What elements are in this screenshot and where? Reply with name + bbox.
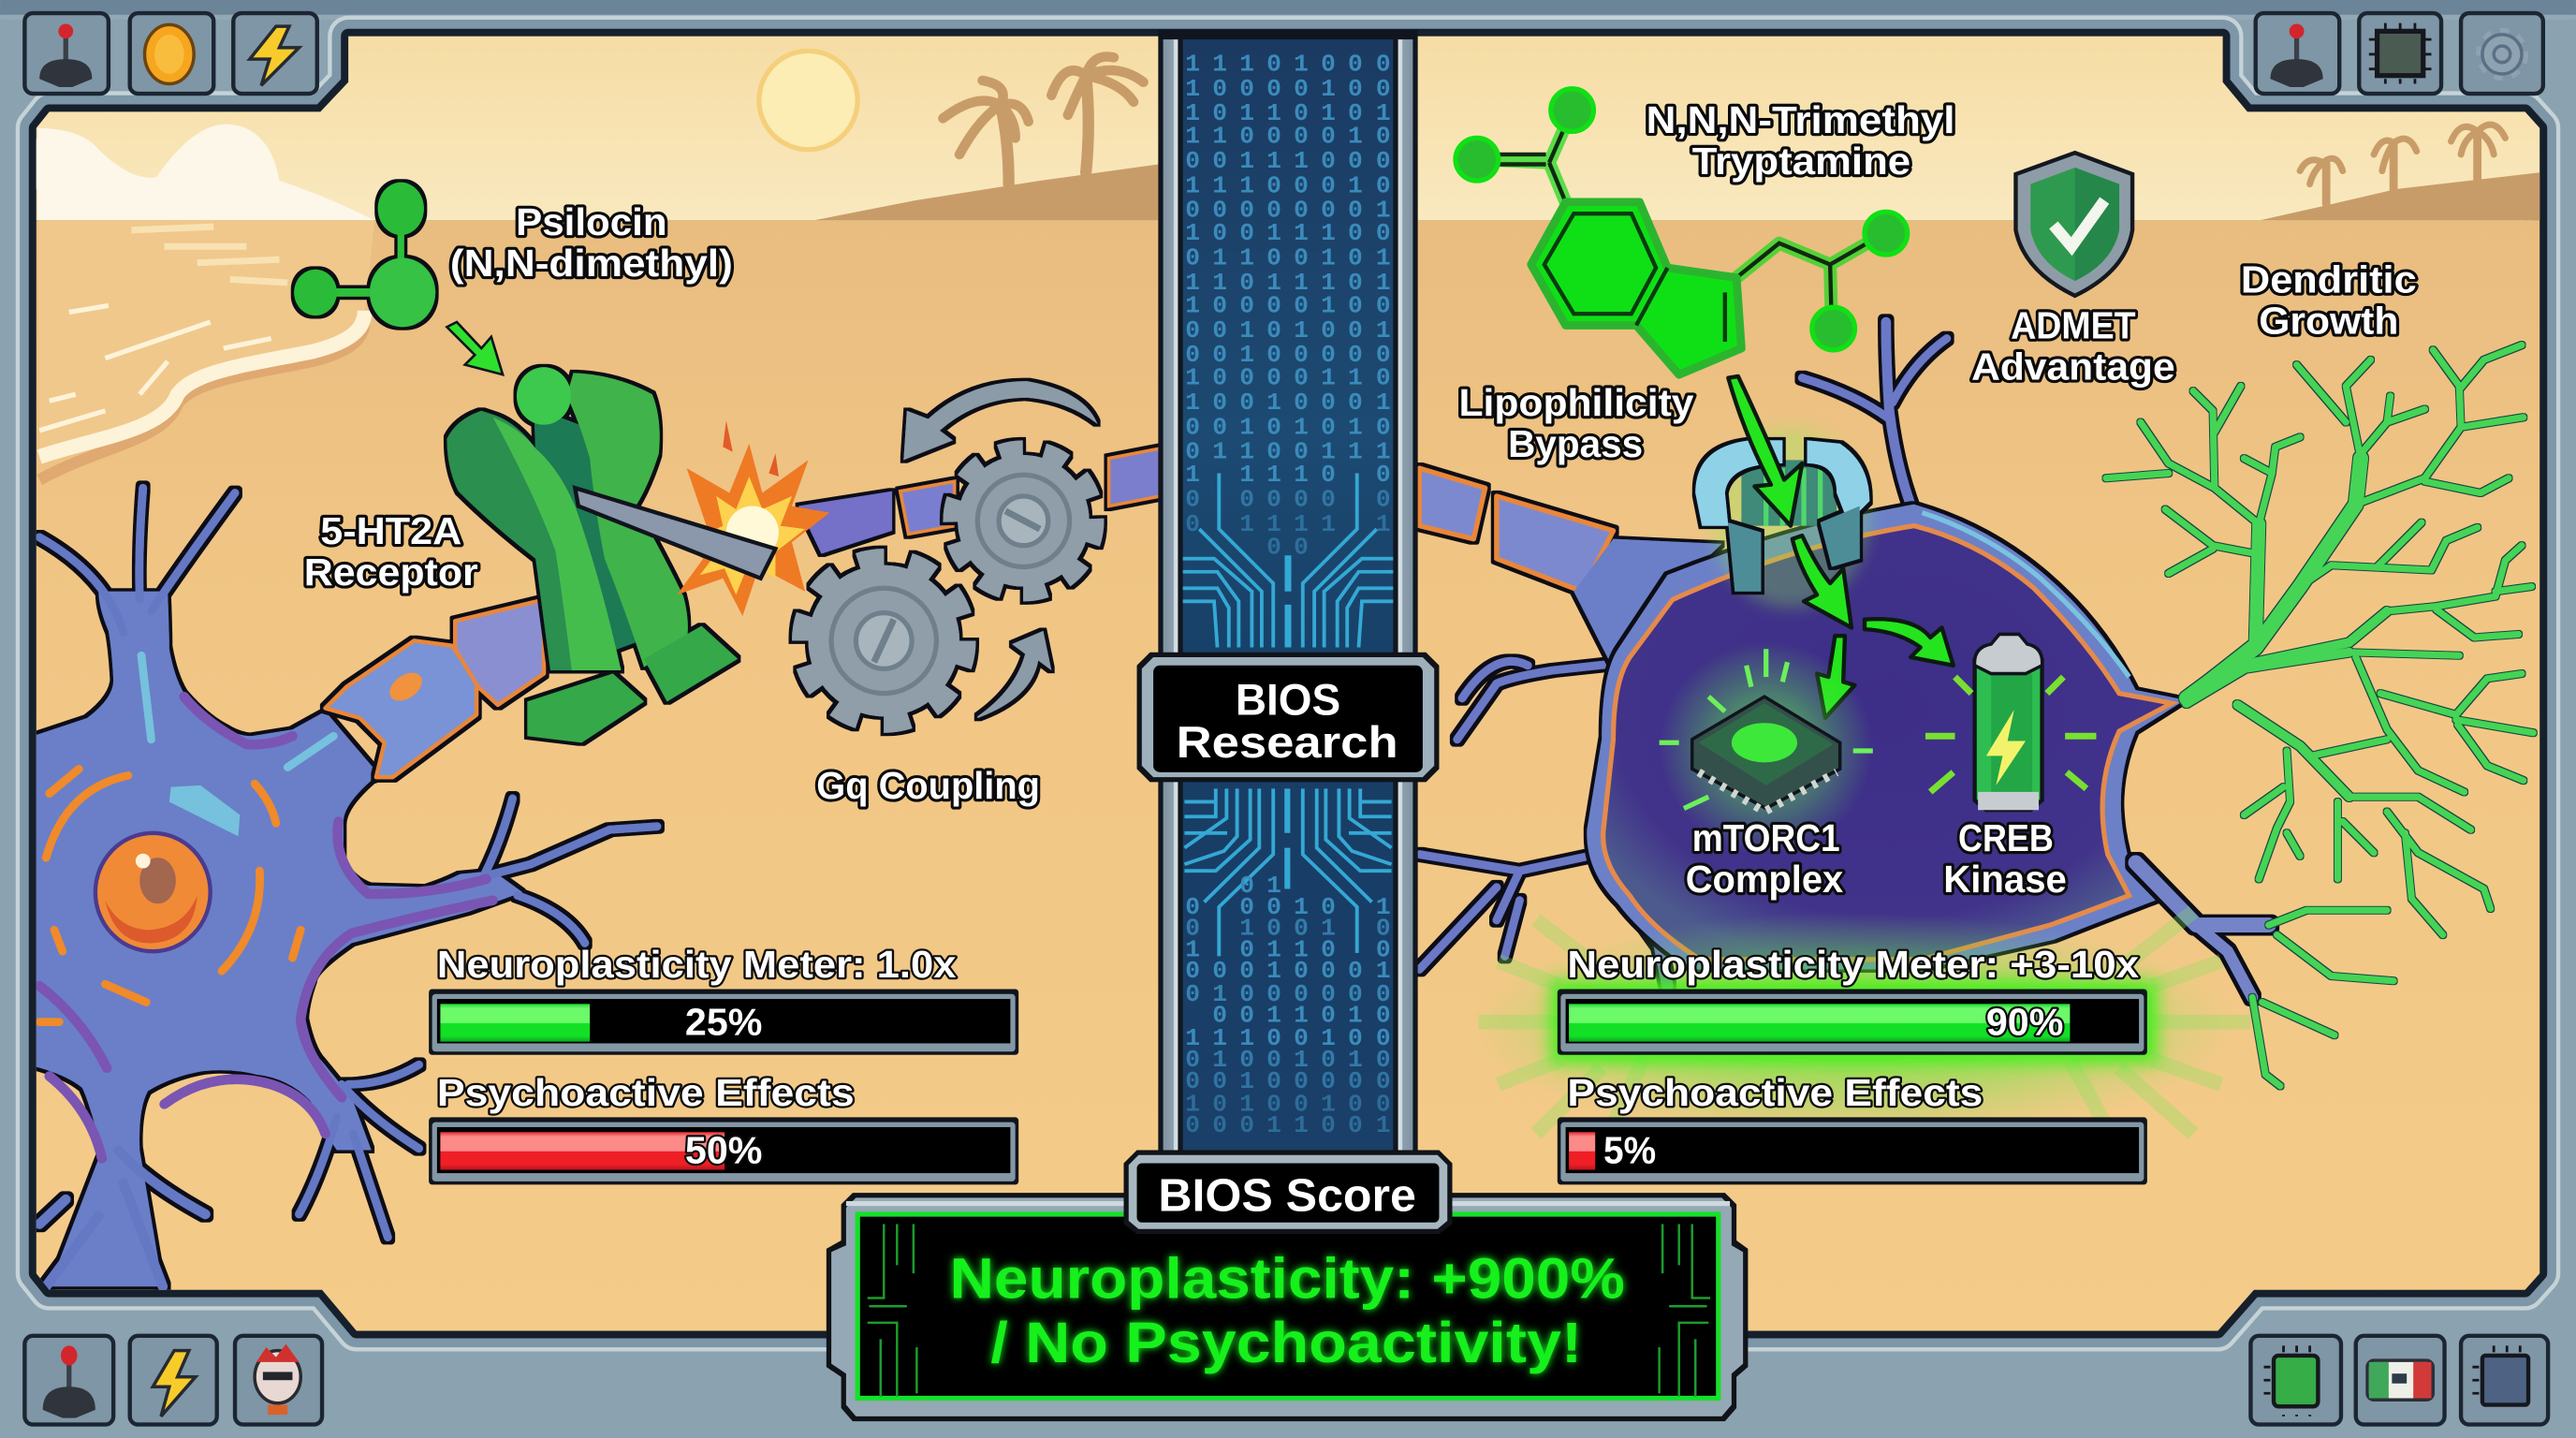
toolbar: bottom right icons <box>2250 1336 2548 1425</box>
binary rain upper: 00 <box>1266 533 1309 561</box>
explosion burst <box>675 420 829 616</box>
green dendritic growth <box>2106 345 2533 935</box>
binary rain lower <box>1185 872 1391 1139</box>
label: CREB Kinase: Kinase <box>1943 858 2067 901</box>
binary rain upper: 00101010 <box>1185 413 1391 441</box>
binary rain upper: 011111 <box>1185 510 1391 538</box>
label: Psilocin: (N,N-dimethyl) <box>450 242 733 285</box>
binary rain upper: 11100010 <box>1185 171 1391 199</box>
binary rain lower: 11100100 <box>1185 1024 1391 1052</box>
axon segments <box>326 448 1160 777</box>
tab: BIOS Score: BIOS Score <box>1158 1170 1416 1221</box>
label: N,N,N-Trimethyl Tryptamine <box>1647 98 1955 183</box>
icon: mTORC1 chip <box>1660 640 1873 855</box>
icon: pixel face <box>235 1336 322 1425</box>
binary rain upper: 10110101 <box>1185 99 1391 127</box>
right neuron dendrites <box>1419 322 1947 986</box>
right neuron body <box>1587 505 2185 969</box>
meter: left psychoactive: 50% <box>685 1129 762 1172</box>
label: Lipophilicity Bypass: Bypass <box>1508 422 1643 465</box>
panel: central binary divider <box>1158 30 1418 1170</box>
molecule: psilocin <box>294 183 435 327</box>
meter: right neuroplasticity: 90% <box>1986 1001 2063 1044</box>
label: 5-HT2A Receptor: Receptor <box>304 550 478 594</box>
binary rain upper: 10000110 <box>1185 364 1391 392</box>
meter: right psychoactive <box>1558 1071 2147 1184</box>
icon: chip <box>2359 13 2441 94</box>
clouds <box>24 125 374 220</box>
left palm island <box>815 56 1158 220</box>
score message: / No Psychoactivity! <box>990 1311 1582 1375</box>
panel: right trimethyl pathway <box>1419 89 2539 1086</box>
binary rain upper: 11000010 <box>1185 123 1391 151</box>
icon: joystick <box>2256 13 2339 94</box>
label: Gq Coupling: Gq Coupling <box>816 764 1040 807</box>
badge: BIOS Research: BIOS <box>1236 675 1340 725</box>
label: 5-HT2A Receptor <box>304 509 478 594</box>
binary rain upper: 10000100 <box>1185 291 1391 319</box>
score message <box>949 1246 1625 1375</box>
rod striking <box>575 488 775 579</box>
binary rain upper: 11011101 <box>1185 269 1391 297</box>
meter: right psychoactive: Psychoactive Effects <box>1567 1071 1983 1114</box>
gear hubs <box>831 475 1070 694</box>
left neuron <box>0 448 1160 1286</box>
rotation arrows <box>903 381 1097 718</box>
score message: Neuroplasticity: +900% <box>949 1246 1625 1311</box>
binary rain upper: 00000001 <box>1185 197 1391 225</box>
label: Dendritic Growth: Dendritic <box>2241 257 2417 301</box>
label: CREB Kinase: CREB <box>1958 816 2054 859</box>
label: N,N,N-Trimethyl Tryptamine: N,N,N-Trimethyl <box>1647 98 1955 141</box>
circuit traces above badge <box>1183 473 1393 647</box>
meter: left psychoactive <box>429 1071 1018 1184</box>
binary rain upper <box>1185 50 1391 561</box>
binary rain upper: 11101000 <box>1185 50 1391 78</box>
rim highlight <box>1922 513 2130 677</box>
binary rain lower: 000101 <box>1185 893 1391 921</box>
icon: coin <box>130 13 213 94</box>
binary rain lower: 01000000 <box>1185 980 1391 1008</box>
label: ADMET Advantage: Advantage <box>1971 345 2175 388</box>
binary rain lower: 00011001 <box>1185 1111 1391 1139</box>
sea and foam shoreline <box>37 220 374 479</box>
arrow: molecule to receptor <box>446 322 503 374</box>
label: mTORC1 Complex <box>1686 816 1844 901</box>
label: ADMET Advantage <box>1971 304 2175 388</box>
toolbar: bottom left icons <box>24 1336 322 1425</box>
binary rain upper: 00101001 <box>1185 316 1391 345</box>
meter: left neuroplasticity: Neuroplasticity Meter: 1.0x <box>437 943 957 986</box>
label: Lipophilicity Bypass <box>1459 381 1694 465</box>
binary rain lower: 01 <box>1239 872 1281 900</box>
binary rain upper: 000000 <box>1185 486 1391 514</box>
icon: lightning <box>233 13 317 94</box>
neuron shading and organelles <box>39 655 493 1158</box>
badge: BIOS Research: Research <box>1177 718 1398 768</box>
binary rain upper: 10000100 <box>1185 75 1391 103</box>
label: ADMET Advantage: ADMET <box>2011 304 2136 347</box>
molecule: N,N,N-trimethyl tryptamine <box>1456 89 1908 374</box>
badge: BIOS Research <box>1137 653 1439 782</box>
icon: settings gear <box>2461 13 2543 94</box>
toolbar: top left icons <box>24 13 317 94</box>
label: Dendritic Growth: Growth <box>2259 299 2398 342</box>
label: CREB Kinase <box>1943 816 2067 901</box>
right axon <box>1419 468 1721 668</box>
meter: right neuroplasticity: Neuroplasticity Meter: +3-10x <box>1567 943 2140 986</box>
icon: joystick <box>24 1336 113 1425</box>
lower right dendrite transition <box>2136 862 2393 1086</box>
circuit decorations <box>868 1224 1710 1397</box>
icon: lightning <box>130 1336 217 1425</box>
meter: left neuroplasticity: 25% <box>685 1001 762 1044</box>
neuron nucleus <box>95 833 211 951</box>
axon spot <box>389 672 422 701</box>
meter: right psychoactive: 5% <box>1603 1129 1656 1172</box>
soma interior <box>1603 526 2172 960</box>
arrows: entry and signal cascade <box>1728 376 1954 718</box>
binary rain lower: 101100 <box>1185 935 1391 963</box>
gears <box>809 455 1090 716</box>
circuit traces below badge <box>1184 788 1392 956</box>
label: N,N,N-Trimethyl Tryptamine: Tryptamine <box>1692 139 1910 183</box>
binary rain upper: 10011100 <box>1185 219 1391 247</box>
binary rain upper: 01100101 <box>1185 244 1391 272</box>
icon: joystick <box>24 13 109 94</box>
meter: left psychoactive: Psychoactive Effects <box>437 1071 855 1114</box>
binary rain upper: 00111000 <box>1185 147 1391 175</box>
right palm island <box>2261 125 2539 220</box>
toolbar: top right icons <box>2256 13 2543 94</box>
binary rain lower: 010010 <box>1185 915 1391 943</box>
ion channel with green glow <box>1695 427 1869 608</box>
binary rain lower: 10100100 <box>1185 1090 1391 1118</box>
label: 5-HT2A Receptor: 5-HT2A <box>320 509 461 552</box>
icon: green chip <box>2250 1336 2341 1425</box>
label: mTORC1 Complex: mTORC1 <box>1692 816 1840 859</box>
glow behind right meter <box>1467 912 2250 1151</box>
panel: left psilocin pathway <box>0 51 1160 1286</box>
binary rain upper: 111100 <box>1185 461 1391 489</box>
label: mTORC1 Complex: Complex <box>1686 858 1844 901</box>
label: Psilocin <box>450 200 733 285</box>
meter: right neuroplasticity <box>1558 943 2147 1055</box>
label: Psilocin: Psilocin <box>516 200 667 243</box>
binary rain lower: 01001010 <box>1185 1046 1391 1074</box>
binary rain lower: 00010001 <box>1185 957 1391 985</box>
icon: sun <box>759 51 857 150</box>
icon: ADMET shield <box>2015 153 2132 296</box>
5-HT2A receptor <box>446 367 738 742</box>
panel: BIOS score <box>827 1193 1748 1421</box>
binary rain upper: 01100111 <box>1185 438 1391 466</box>
binary rain lower: 00100000 <box>1185 1067 1391 1095</box>
label: Dendritic Growth <box>2241 257 2417 342</box>
meter: left neuroplasticity <box>429 943 1018 1055</box>
label: Lipophilicity Bypass: Lipophilicity <box>1459 381 1694 424</box>
binary rain upper: 10010001 <box>1185 389 1391 417</box>
binary rain upper: 00100000 <box>1185 341 1391 369</box>
tab: BIOS Score <box>1123 1151 1453 1234</box>
binary rain lower: 0011010 <box>1212 1002 1391 1030</box>
icon: tricolour cartridge <box>2356 1336 2445 1425</box>
icon: CREB battery <box>1925 634 2096 810</box>
icon: grey chip <box>2461 1336 2548 1425</box>
